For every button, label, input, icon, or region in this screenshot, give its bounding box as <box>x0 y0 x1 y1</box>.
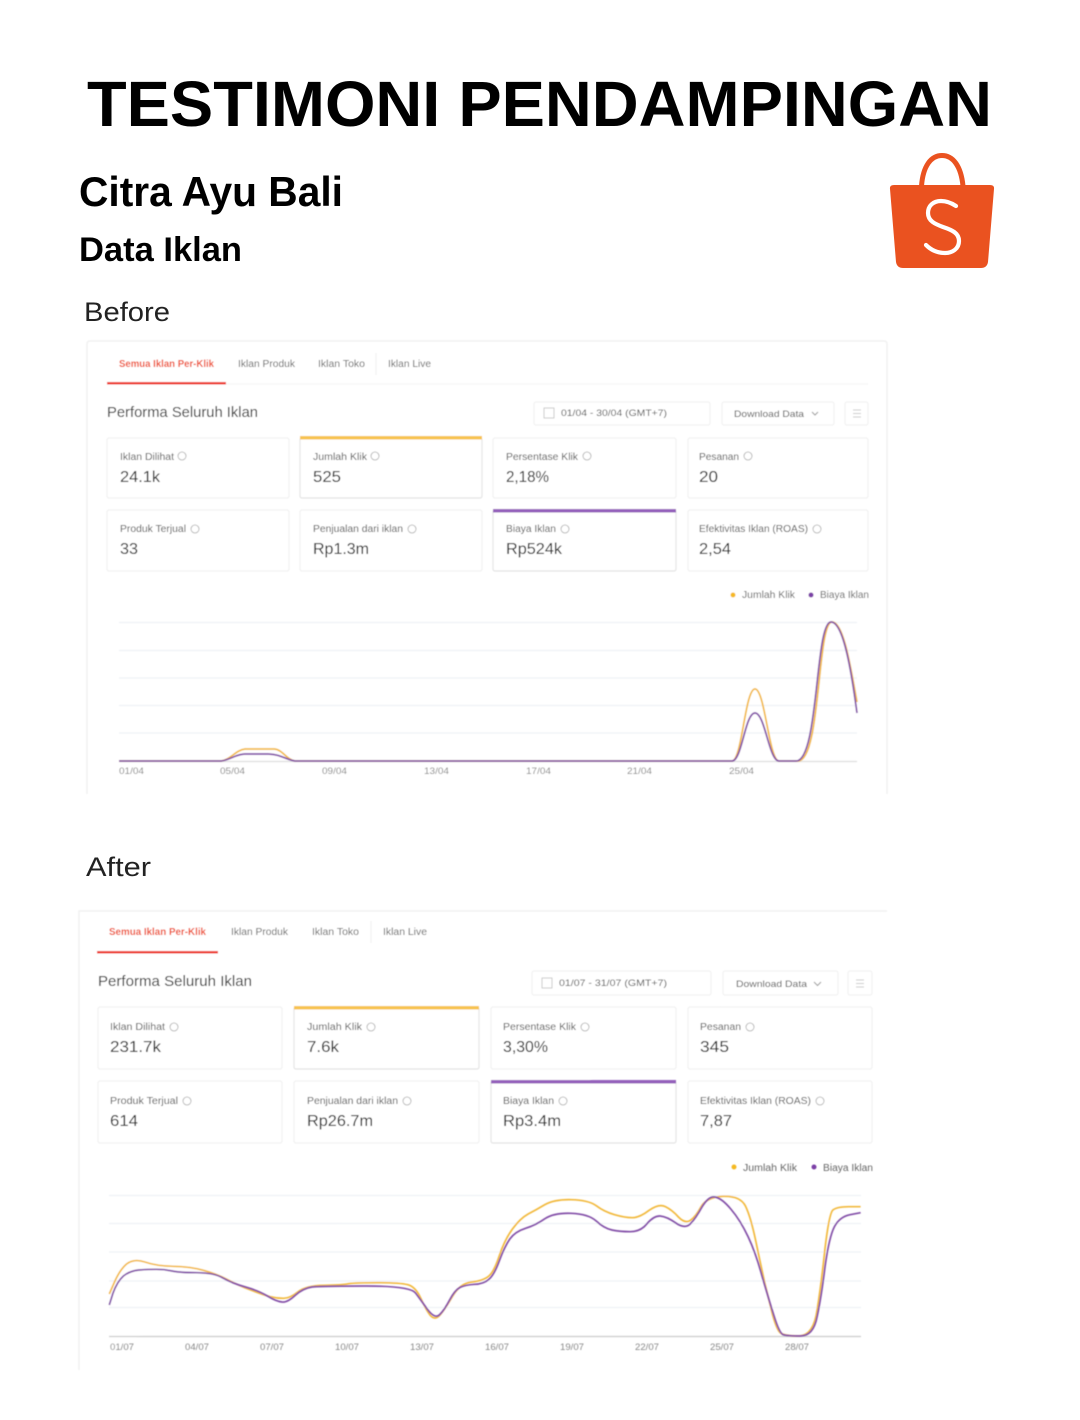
line chart: after: 13/07 <box>410 1342 434 1353</box>
legend: Jumlah Klik <box>742 590 796 601</box>
line chart: before: 25/04 <box>729 766 754 777</box>
controls: 01/07 - 31/07 (GMT+7) <box>559 978 667 989</box>
metric cards: Efektivitas Iklan (ROAS) <box>699 524 808 535</box>
controls <box>532 971 872 995</box>
metric cards: 33 <box>120 541 138 558</box>
metric cards: Rp26.7m <box>307 1113 373 1130</box>
line chart: before: 21/04 <box>627 766 652 777</box>
metric cards <box>107 436 868 571</box>
tabs: Semua Iklan Per-Klik <box>109 927 206 938</box>
line chart: after: 19/07 <box>560 1342 584 1353</box>
legend: Biaya Iklan <box>823 1163 873 1174</box>
label: after: After <box>86 852 151 882</box>
tabs <box>107 353 868 384</box>
metric cards: 345 <box>700 1039 729 1056</box>
metric cards: 231.7k <box>110 1039 162 1056</box>
legend: Biaya Iklan <box>820 590 869 601</box>
controls: Download Data <box>736 979 808 990</box>
metric cards: 2,54 <box>699 541 731 558</box>
line chart: after <box>109 1196 861 1353</box>
metric cards: 24.1k <box>120 469 161 486</box>
line chart: after: 16/07 <box>485 1342 509 1353</box>
legend <box>732 1163 873 1174</box>
line chart: after: 22/07 <box>635 1342 659 1353</box>
line chart: after: 28/07 <box>785 1342 809 1353</box>
metric cards: Pesanan <box>699 452 739 463</box>
panel: before screenshot <box>87 341 887 794</box>
metric cards: Rp1.3m <box>313 541 369 558</box>
line chart: before: 05/04 <box>220 766 245 777</box>
metric cards: 7.6k <box>307 1039 340 1056</box>
line chart: before: 09/04 <box>322 766 347 777</box>
metric cards: Persentase Klik <box>506 452 579 463</box>
tabs: Iklan Toko <box>312 927 359 938</box>
title: TESTIMONI PENDAMPINGAN <box>87 68 992 140</box>
line chart: before: 17/04 <box>526 766 551 777</box>
tabs: Iklan Produk <box>231 927 289 938</box>
label: before: Before <box>84 297 170 327</box>
metric cards: 2,18% <box>506 469 549 486</box>
metric cards: 7,87 <box>700 1113 732 1130</box>
metric cards: 525 <box>313 469 341 486</box>
metric cards: Produk Terjual <box>120 524 186 535</box>
tabs <box>97 921 427 954</box>
legend <box>730 590 869 601</box>
icon: shopee bag <box>890 156 994 268</box>
heading: performa: Performa Seluruh Iklan <box>98 973 252 990</box>
line chart: after: 04/07 <box>185 1342 209 1353</box>
tabs: Iklan Produk <box>238 359 296 370</box>
tabs: Iklan Toko <box>318 359 365 370</box>
metric cards: Biaya Iklan <box>503 1096 554 1107</box>
line chart: after: 25/07 <box>710 1342 734 1353</box>
tabs: Iklan Live <box>383 927 427 938</box>
line chart: before <box>119 622 857 777</box>
metric cards: 20 <box>699 469 718 486</box>
metric cards: Penjualan dari iklan <box>307 1096 398 1107</box>
metric cards: Pesanan <box>700 1022 741 1033</box>
tabs: Iklan Live <box>388 359 431 370</box>
metric cards: 3,30% <box>503 1039 548 1056</box>
metric cards: Iklan Dilihat <box>110 1022 165 1033</box>
metric cards: Produk Terjual <box>110 1096 178 1107</box>
metric cards: Rp524k <box>506 541 563 558</box>
line chart: before: 13/04 <box>424 766 449 777</box>
metric cards: Persentase Klik <box>503 1022 577 1033</box>
metric cards <box>98 1006 872 1143</box>
metric cards: Jumlah Klik <box>307 1022 363 1033</box>
line chart: after: 10/07 <box>335 1342 359 1353</box>
metric cards: 614 <box>110 1113 138 1130</box>
heading: store name: Citra Ayu Bali <box>79 168 343 215</box>
metric cards: Jumlah Klik <box>313 452 368 463</box>
line chart: before: 01/04 <box>119 766 144 777</box>
tabs: Semua Iklan Per-Klik <box>119 359 214 370</box>
metric cards: Biaya Iklan <box>506 524 556 535</box>
controls <box>534 402 868 425</box>
legend: Jumlah Klik <box>743 1163 798 1174</box>
controls: 01/04 - 30/04 (GMT+7) <box>561 408 667 419</box>
controls: Download Data <box>734 409 805 420</box>
metric cards: Penjualan dari iklan <box>313 524 403 535</box>
panel: after screenshot <box>79 911 887 1370</box>
line chart: after: 01/07 <box>110 1342 134 1353</box>
metric cards: Efektivitas Iklan (ROAS) <box>700 1096 811 1107</box>
heading: performa: Performa Seluruh Iklan <box>107 404 258 421</box>
metric cards: Rp3.4m <box>503 1113 561 1130</box>
metric cards: Iklan Dilihat <box>120 452 174 463</box>
line chart: after: 07/07 <box>260 1342 284 1353</box>
heading: data iklan: Data Iklan <box>79 231 242 269</box>
